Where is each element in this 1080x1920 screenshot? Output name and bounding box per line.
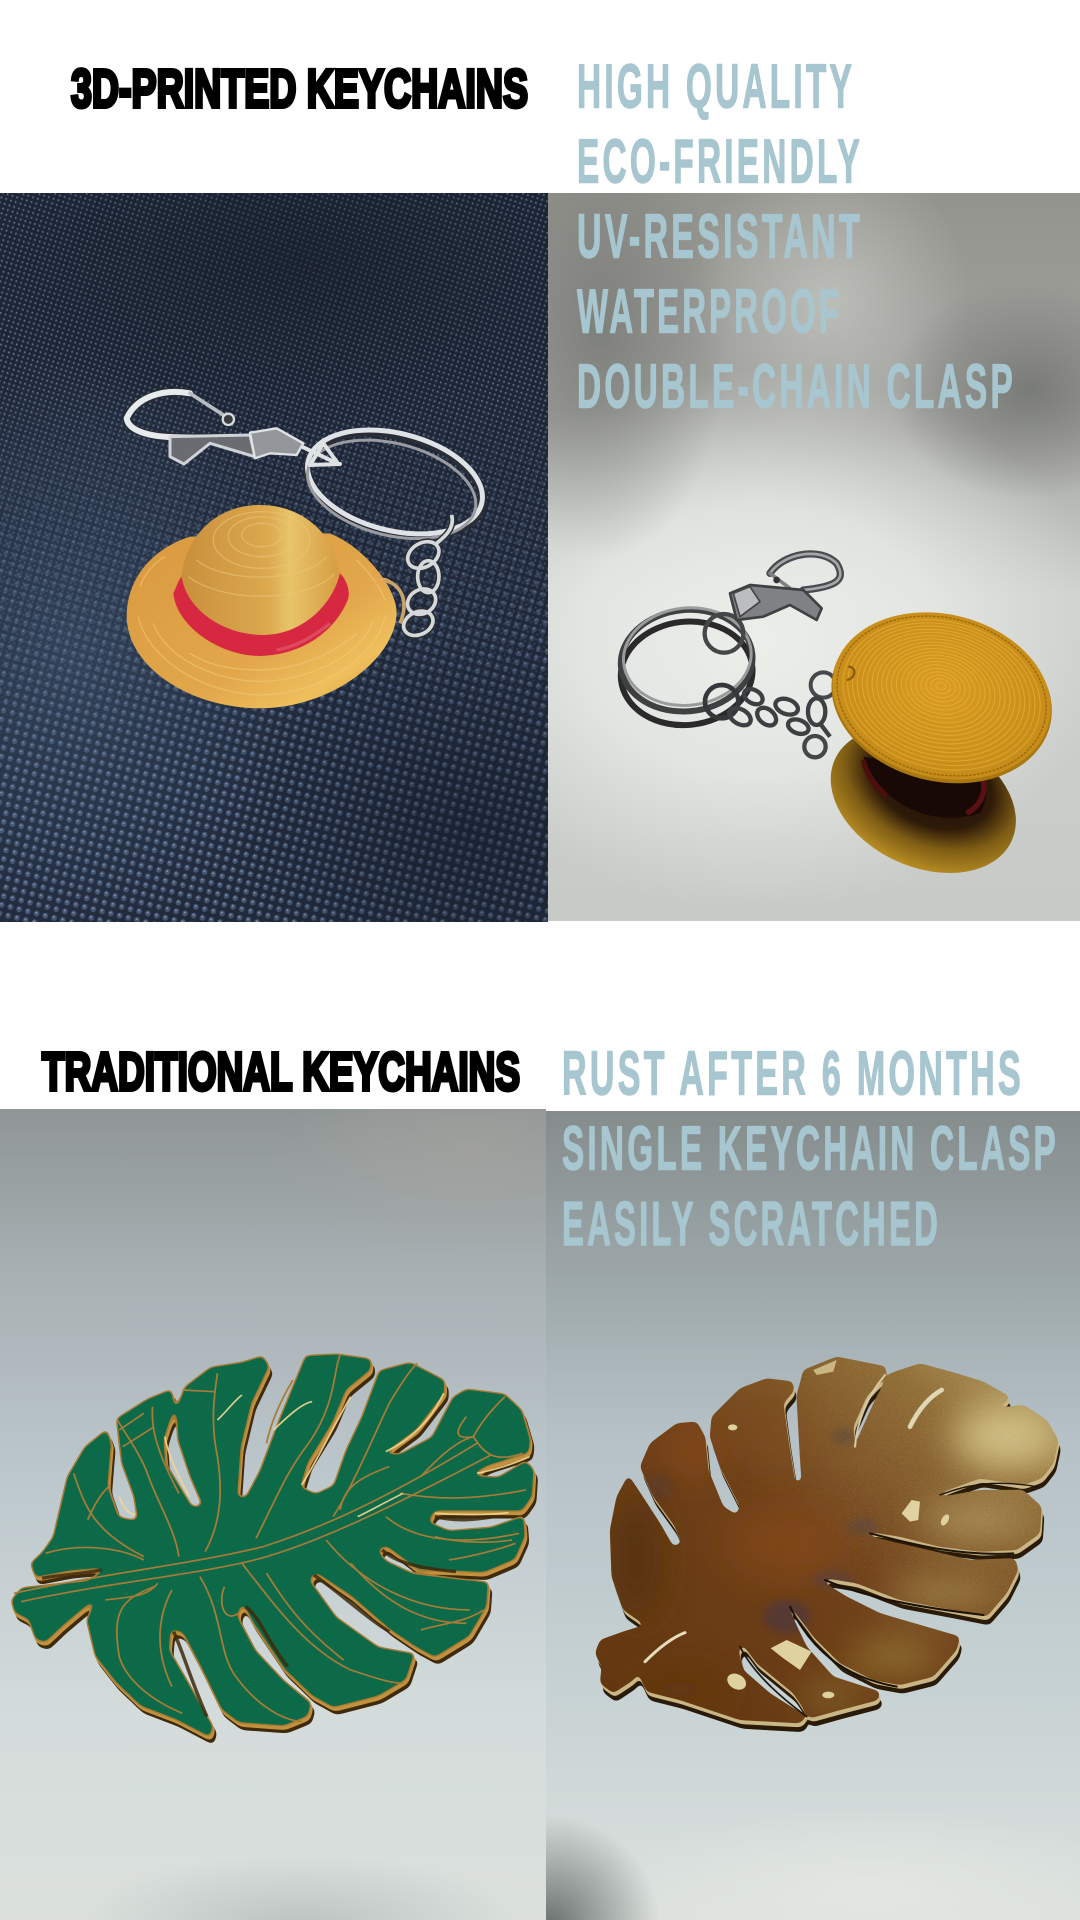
heading: traditional keychains: TRADITIONAL KEYCHAINS [42,1042,520,1102]
icon: keyring and lobster clasp [127,392,493,555]
text block: 3D-printed benefits list: HIGH QUALITY [577,52,855,122]
icon: dark hat underside reflection [830,738,1016,873]
icon: green enamel monstera leaf [11,1353,538,1745]
text block: 3D-printed benefits list [577,52,1016,422]
icon: split rings and clasp [616,554,840,757]
icon: chain to disc [726,686,830,737]
icon: metal chain links [383,515,452,640]
panel: traditional enamel leaf photo [0,1109,546,1920]
panel: rusted leaf photo [546,1111,1080,1920]
rust colour patches [610,1358,1058,1720]
text block: traditional drawbacks list [562,1040,1059,1259]
glossy gold highlights [119,1393,530,1517]
veins [117,1420,179,1557]
worn flecks [724,1360,951,1698]
icon: golden hat top disc [831,612,1052,784]
dark slot shading [42,1517,494,1717]
icon: straw hat keychain [127,505,397,708]
midrib [14,1355,526,1722]
icon: rusted monstera leaf [596,1357,1060,1732]
panel: 3D-printed hat top-side photo [548,193,1080,921]
panel: 3D-printed hat photo on denim [0,193,548,922]
text block: 3D-printed benefits list: WATERPROOF [577,278,842,346]
slit and edge highlights [645,1375,1037,1717]
heading: 3D-printed keychains: 3D-PRINTED KEYCHAINS [71,59,528,119]
